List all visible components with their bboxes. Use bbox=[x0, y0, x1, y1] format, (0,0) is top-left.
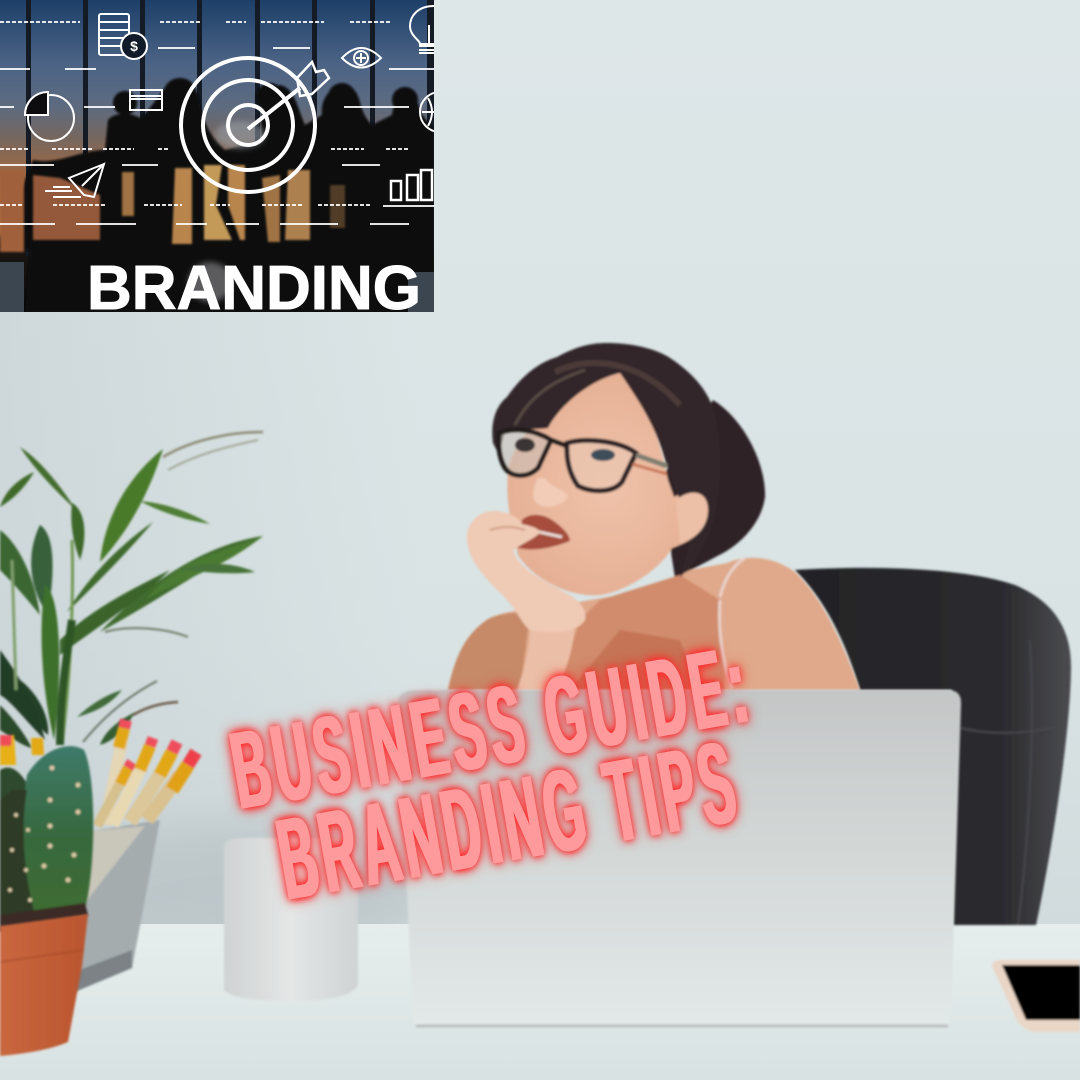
desk surface bbox=[0, 924, 1080, 1080]
eye icon bbox=[342, 48, 381, 68]
arm bbox=[517, 625, 575, 690]
globe icon bbox=[419, 92, 434, 132]
inset photo: branding team silhouette bbox=[0, 0, 460, 323]
cactus flowers bbox=[0, 735, 16, 765]
branding heading: BRANDING bbox=[87, 254, 421, 323]
terracotta pot bbox=[0, 914, 88, 1056]
nose bbox=[533, 478, 568, 507]
sunset reflections between silhouettes bbox=[0, 165, 345, 252]
white rule lines bbox=[0, 22, 434, 224]
cactus spines bbox=[8, 766, 80, 902]
potted plant bbox=[0, 432, 263, 748]
office chair bbox=[795, 568, 1071, 925]
lips bbox=[518, 515, 570, 549]
window bars bbox=[26, 0, 434, 256]
pencil holder bbox=[72, 820, 160, 993]
title line 2: BRANDING TIPS bbox=[269, 716, 749, 924]
ear bbox=[676, 493, 708, 544]
hand bbox=[467, 511, 585, 632]
meeting silhouettes bbox=[0, 78, 434, 312]
palm fronds bbox=[100, 536, 263, 632]
title line 1: BUSINESS GUIDE: bbox=[223, 622, 761, 833]
shoulders and chest bbox=[448, 558, 860, 690]
bar chart icon bbox=[391, 170, 432, 200]
face bbox=[507, 373, 708, 595]
paper plane icon bbox=[45, 164, 104, 197]
pie chart icon bbox=[25, 92, 74, 141]
woman thinking at the desk bbox=[448, 343, 860, 690]
hair bbox=[492, 343, 720, 577]
smartphone bbox=[992, 960, 1080, 1032]
neon title: Business Guide: Branding Tips bbox=[220, 622, 761, 924]
card icon bbox=[130, 90, 162, 110]
hair bun behind head bbox=[660, 400, 765, 578]
floor and lower reflections bbox=[0, 262, 434, 312]
target with arrow icon bbox=[181, 58, 329, 192]
coins and dollar icon: $ bbox=[130, 38, 138, 54]
pencils bbox=[97, 720, 196, 826]
mug bbox=[224, 838, 358, 1001]
laptop bbox=[398, 690, 961, 1028]
light bulb icon bbox=[410, 6, 434, 53]
coins and dollar icon bbox=[99, 14, 147, 59]
glasses bbox=[499, 430, 667, 491]
cactus bbox=[0, 735, 93, 932]
